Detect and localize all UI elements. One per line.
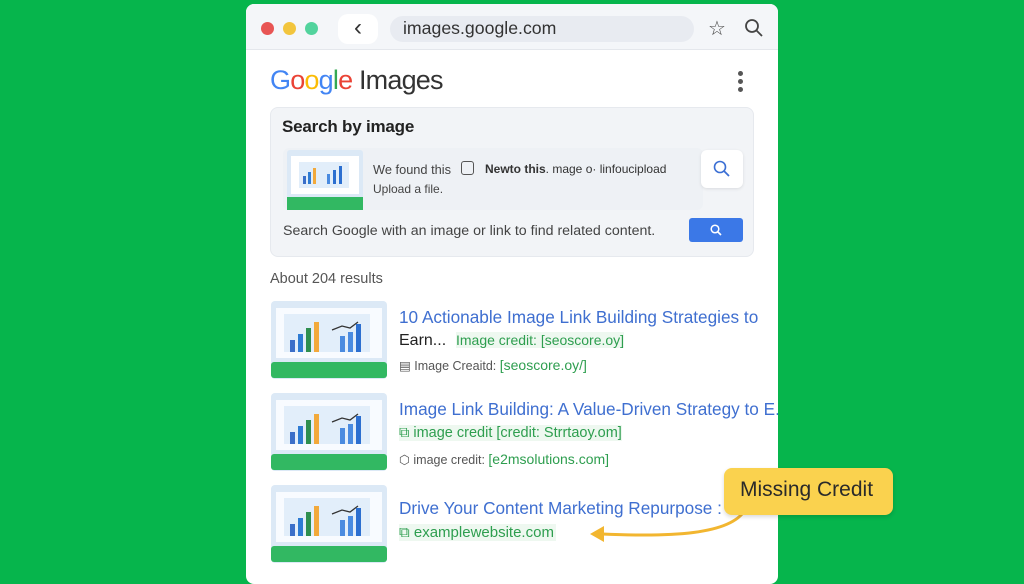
- blue search button: [689, 218, 743, 242]
- back button: ‹: [354, 14, 362, 41]
- upload row: [283, 148, 703, 210]
- panel: search by image: [270, 107, 754, 257]
- upload row: Newto this. mage o· linfoucipload: [485, 162, 666, 176]
- arrow: to missing credit: [590, 515, 743, 542]
- thumbnail: [271, 301, 387, 379]
- title: Drive Your Content Marketing Repurpose :: [399, 498, 722, 518]
- heading: Search by image: [282, 117, 414, 136]
- description text: Search Google with an image or link to find related content.: [283, 223, 655, 239]
- title: 10 Actionable Image Link Building Strategies to: [399, 307, 758, 327]
- result 2: ⬡ image credit: [e2msolutions.com]: [399, 451, 609, 467]
- url bar: [390, 16, 694, 42]
- search icon button: [701, 150, 743, 188]
- result 1: Earn...: [399, 332, 446, 349]
- menu dots: [738, 71, 743, 92]
- callout: missing credit: [724, 468, 893, 515]
- checkbox: [461, 161, 474, 175]
- url bar: images.google.com: [403, 18, 556, 38]
- upload row: We found this: [373, 162, 451, 177]
- thumbnail: [271, 485, 387, 563]
- title: Image Link Building: A Value-Driven Strategy to E.: [399, 399, 778, 419]
- upload row: Upload a file.: [373, 182, 443, 196]
- result 1: ▤ Image Creaitd: [seoscore.oy/]: [399, 357, 587, 373]
- credit: ⧉ image credit [credit: Strrtaoy.om]: [399, 425, 622, 441]
- back button: [338, 14, 378, 44]
- logo: Google Images: [270, 65, 443, 95]
- toolbar: [246, 4, 778, 50]
- thumbnail: [271, 393, 387, 471]
- callout: missing credit: Missing Credit: [740, 478, 873, 501]
- window dots: [261, 22, 318, 35]
- result 3: [271, 485, 722, 563]
- result 2: [271, 393, 778, 471]
- credit: Image credit: [seoscore.oy]: [456, 332, 624, 348]
- icon: search: [745, 19, 763, 37]
- result 1: [271, 301, 758, 379]
- credit: ⧉ examplewebsite.com: [399, 524, 554, 541]
- thumbnail: [287, 150, 363, 210]
- browser window: [246, 4, 778, 584]
- icon: star/home: ☆: [708, 18, 726, 40]
- results count: About 204 results: [270, 271, 383, 287]
